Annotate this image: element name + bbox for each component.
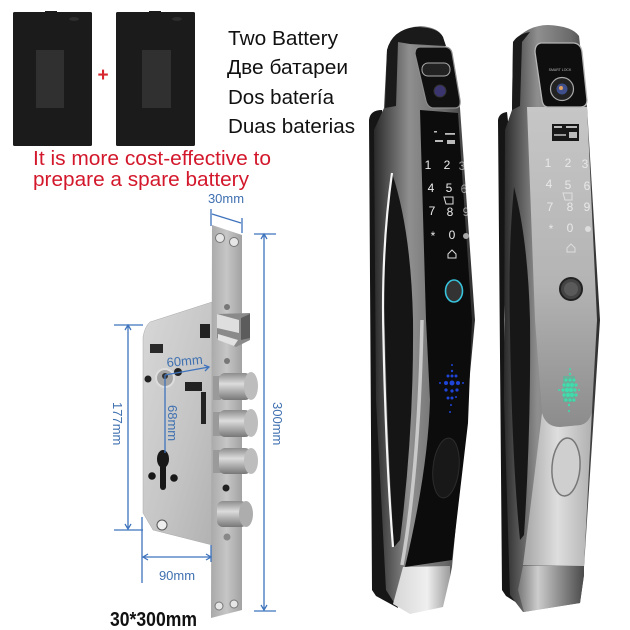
text block: two battery in four languages: Two Battery [228, 28, 338, 50]
fingerprint sensor [446, 280, 462, 302]
handle button [550, 437, 582, 497]
callout: spare battery [33, 148, 271, 191]
keypad: 2 [444, 158, 451, 172]
dimension: 90mm: 90mm [159, 568, 195, 583]
blue LED dots [439, 364, 464, 413]
keypad [545, 156, 591, 252]
camera [434, 85, 446, 97]
status display [552, 124, 579, 141]
green LED dots [558, 368, 580, 412]
status display [434, 131, 455, 144]
keypad: 3 [582, 157, 589, 171]
handle opening [384, 173, 413, 547]
keypad: 1 [545, 156, 552, 170]
latch [217, 313, 250, 347]
smart lock: black front [369, 26, 475, 614]
keypad: 1 [425, 158, 432, 172]
smart lock: silver front [498, 25, 600, 612]
dimension: 60mm [165, 352, 209, 375]
lower panel [523, 410, 592, 566]
keypad: 2 [565, 156, 572, 170]
keypad: * [431, 229, 436, 243]
brand label: SMART LOCK [549, 68, 572, 72]
metal shell [374, 26, 475, 604]
handle opening [510, 187, 530, 540]
keypad: 5 [446, 181, 453, 195]
dimension: 30mm: 30mm [208, 191, 244, 206]
bolts [213, 372, 258, 527]
icon: battery 1 [13, 11, 92, 146]
keypad [425, 158, 470, 258]
back plate [369, 110, 398, 608]
keypad: 4 [546, 177, 553, 191]
keypad: 9 [584, 200, 591, 214]
dimension: 90mm [142, 517, 211, 583]
camera window [535, 43, 587, 107]
dimension: 68mm [165, 375, 180, 453]
sensor strip [422, 63, 450, 76]
keypad: 6 [461, 182, 468, 196]
text block: two battery in four languages: Duas baterias [228, 116, 355, 138]
handle button [430, 437, 462, 499]
bottom cap [393, 566, 450, 614]
keypad: 8 [567, 200, 574, 214]
camera window [415, 47, 460, 108]
text block: two battery in four languages: Dos batería [228, 87, 335, 109]
battery pair [13, 11, 195, 146]
screws and holes [144, 234, 238, 610]
fingerprint sensor [560, 278, 582, 300]
keypad: * [549, 222, 554, 236]
keypad: 8 [447, 205, 454, 219]
keypad: 9 [463, 205, 470, 219]
keypad: 0 [567, 221, 574, 235]
keypad: 7 [429, 204, 436, 218]
cylinder keyhole [148, 450, 178, 490]
keypad: 6 [584, 179, 591, 193]
dimension: 60mm: 60mm [166, 352, 203, 370]
dimension: 300mm [254, 234, 285, 611]
callout: spare battery: It is more cost-effective to [33, 148, 271, 170]
keypad: 3 [459, 159, 466, 173]
dimension: 177mm: 177mm [110, 402, 125, 445]
back plate [498, 112, 525, 608]
dimension: 300mm: 300mm [270, 402, 285, 445]
bottom cap [518, 566, 584, 612]
face plate [211, 225, 242, 618]
metal shell [504, 25, 600, 612]
dimension: 30mm [208, 191, 244, 233]
silver front panel with mesh [527, 107, 597, 427]
dimension: 177mm [110, 325, 143, 530]
dimension: 68mm: 68mm [165, 405, 180, 441]
case plate [143, 302, 212, 545]
head dark band [385, 27, 446, 108]
callout: spare battery: prepare a spare battery [33, 169, 249, 191]
keypad: 7 [547, 200, 554, 214]
text block: two battery in four languages [227, 28, 355, 138]
text block: two battery in four languages: Две батареи [227, 57, 348, 79]
mortise lock body [143, 225, 258, 618]
camera [550, 78, 574, 100]
head dark band [512, 32, 530, 110]
keypad: 5 [565, 178, 572, 192]
front panel [405, 110, 472, 567]
keypad: 0 [449, 228, 456, 242]
keypad: 4 [428, 181, 435, 195]
handle highlight [383, 173, 393, 547]
icon: battery 2 [116, 11, 195, 146]
plus sign: + [97, 65, 109, 86]
